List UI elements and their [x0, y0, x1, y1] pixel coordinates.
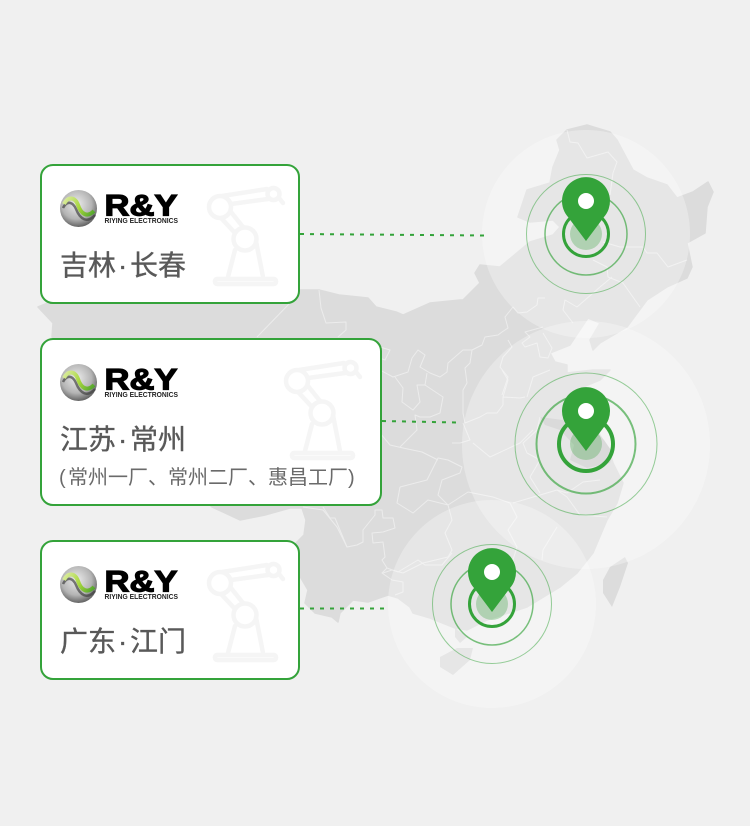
heading: 吉林·长春 [60, 250, 186, 281]
logo: RIYING ELECTRONICS [104, 390, 178, 399]
logo [60, 364, 178, 401]
logo [60, 566, 178, 603]
heading: 广东·江门 [60, 626, 186, 657]
map of China [38, 125, 713, 675]
robot arm watermark [209, 564, 283, 660]
logo [60, 190, 178, 227]
connector: Jilin [300, 234, 484, 236]
marker: Changchun [526, 174, 646, 294]
heading: 江苏·常州 [60, 424, 186, 455]
highlight circle: Changzhou [462, 321, 710, 569]
marker: Changzhou [515, 373, 657, 515]
logo: RIYING ELECTRONICS [104, 592, 178, 601]
island: Hainan [440, 648, 473, 675]
province borders [257, 130, 687, 595]
logo: R&Y [104, 566, 178, 598]
highlight circle: Changchun [482, 130, 690, 338]
subheading: (常州一厂、常州二厂、惠昌工厂) [59, 466, 355, 489]
panel: Jilin Changchun [41, 165, 299, 303]
highlighted province: Jiangsu [540, 417, 613, 468]
logo: R&Y [104, 364, 178, 396]
connector: Guangdong [300, 608, 384, 610]
panel: Jiangsu Changzhou [41, 339, 381, 505]
logo: R&Y [104, 190, 178, 222]
panel: Guangdong Jiangmen [41, 541, 299, 679]
peninsula: Leizhou [455, 628, 467, 643]
highlight circle: Jiangmen [388, 500, 596, 708]
robot arm watermark [209, 188, 283, 284]
robot arm watermark [286, 362, 360, 458]
marker: Jiangmen [432, 544, 552, 664]
island: Taiwan [603, 557, 628, 607]
logo: RIYING ELECTRONICS [104, 216, 178, 225]
connector: Jiangsu [382, 421, 456, 422]
